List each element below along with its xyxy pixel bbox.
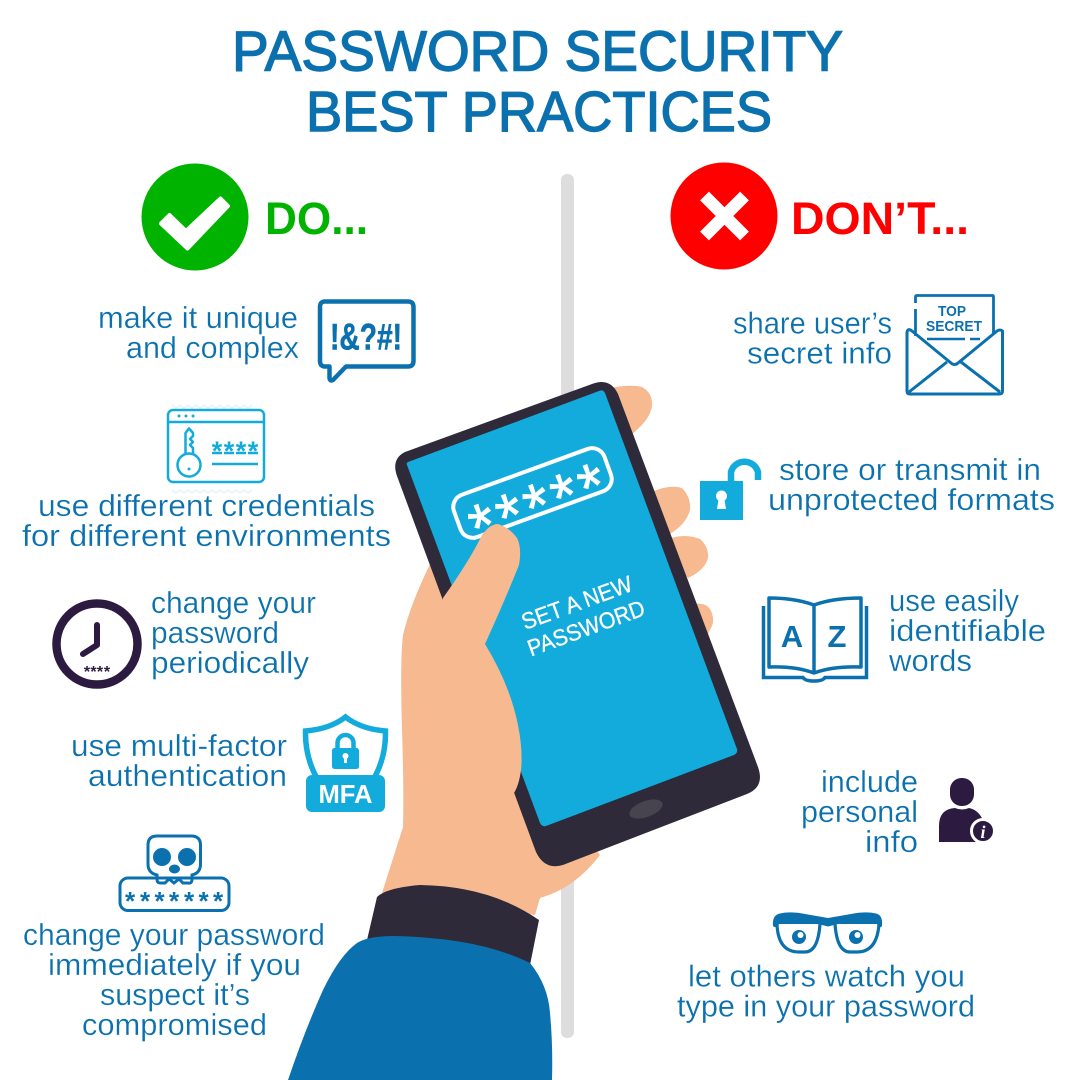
heading: do: DO... (265, 193, 368, 244)
do item: credentials text: use different credentials (38, 488, 375, 523)
icon: watching glasses (773, 912, 882, 952)
title: PASSWORD SECURITY (232, 20, 843, 84)
icon: top secret envelope (907, 296, 1002, 394)
do item: periodic text: periodically (151, 645, 310, 680)
icon: red cross (670, 162, 778, 270)
do item: compromised text (23, 917, 325, 1042)
dont item: personal text (801, 764, 918, 859)
title: BEST PRACTICES (306, 80, 772, 144)
do item: unique text: and complex (126, 330, 299, 365)
icon: speech bubble (320, 302, 414, 380)
icon: green check (142, 164, 248, 270)
cuff (367, 885, 539, 965)
thumb (438, 524, 522, 793)
screen caption: PASSWORD (524, 595, 648, 661)
icon: mfa shield (305, 717, 386, 812)
dont item: watching text (677, 958, 975, 1024)
do item: credentials text: for different environments (22, 518, 391, 553)
do item: periodic text: change your (151, 585, 316, 620)
do item: compromised text: immediately if you (48, 947, 301, 982)
icon: mfa shield: MFA (318, 779, 373, 809)
phone body (395, 382, 760, 866)
fingers behind phone (610, 386, 713, 636)
icon: open padlock (700, 462, 758, 520)
dont item: unprotected text: store or transmit in (779, 452, 1041, 487)
icon: speech bubble: !&?#! (330, 316, 402, 358)
do item: periodic text: password (151, 615, 279, 650)
do item: mfa text: use multi-factor (71, 728, 287, 763)
icon: credentials window (168, 405, 264, 493)
dont item: watching text: let others watch you (688, 958, 965, 994)
do item: credentials text (22, 488, 391, 553)
dont item: personal text: info (865, 824, 918, 859)
icon: skull and password: ******* (125, 886, 224, 916)
dont item: secret text: secret info (747, 336, 892, 370)
dont item: personal text: include (821, 764, 918, 799)
icon: dictionary book (764, 598, 866, 681)
icon: dictionary book: Z (828, 619, 847, 654)
icon: top secret envelope: TOP (938, 303, 966, 320)
dont item: identifiable text: words (888, 643, 972, 678)
dont item: secret text: share user’s (733, 306, 892, 340)
do item: mfa text: authentication (88, 758, 287, 793)
do item: compromised text: compromised (82, 1007, 267, 1042)
heading: don't: DON’T... (791, 193, 969, 244)
title (232, 20, 843, 144)
icon: credentials window: **** (212, 436, 259, 466)
screen caption (518, 571, 648, 661)
icon: person with info badge: i (980, 822, 986, 842)
dont item: unprotected text: unprotected formats (768, 482, 1055, 517)
icon: clock (56, 604, 138, 684)
dont item: identifiable text: identifiable (889, 613, 1046, 648)
do item: mfa text (71, 728, 287, 793)
home button (627, 795, 665, 823)
sleeve (288, 936, 552, 1080)
screen caption: SET A NEW (518, 571, 636, 635)
phone screen (407, 390, 737, 826)
dont item: watching text: type in your password (677, 988, 975, 1024)
icon: person with info badge (939, 778, 994, 842)
password field: ***** (459, 447, 617, 565)
dont item: secret text (733, 306, 892, 370)
icon: clock: **** (84, 664, 111, 681)
do item: unique text: make it unique (98, 300, 298, 335)
icon: dictionary book: A (781, 619, 803, 654)
dont item: personal text: personal (801, 794, 918, 829)
do item: compromised text: change your password (23, 917, 325, 952)
do item: periodic text (151, 585, 316, 680)
do item: compromised text: suspect it’s (100, 977, 250, 1012)
icon: skull and password (120, 836, 229, 916)
dont item: identifiable text: use easily (889, 583, 1019, 618)
do item: unique text (98, 300, 299, 365)
dont item: identifiable text (888, 583, 1046, 678)
dont item: unprotected text (768, 452, 1055, 517)
illustration: hand holding phone (288, 382, 760, 1080)
back of hand (382, 562, 600, 915)
center divider (561, 174, 574, 1038)
icon: top secret envelope: SECRET (926, 318, 982, 335)
